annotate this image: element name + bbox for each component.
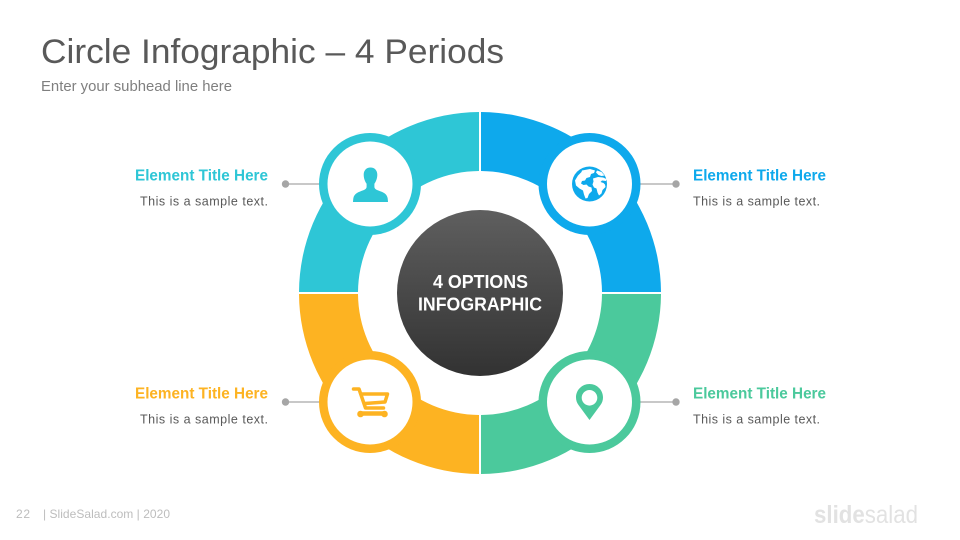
badge: globe: [538, 133, 640, 235]
text block: top-right: [693, 168, 826, 208]
text block: bottom-right: Element Title Here: [693, 386, 826, 402]
text block: top-left: Element Title Here: [135, 168, 268, 184]
icon: globe: [572, 166, 607, 202]
icon: person: [353, 168, 388, 202]
title: Circle Infographic – 4 Periods: [41, 33, 504, 71]
text block: top-right: Element Title Here: [693, 168, 826, 184]
center text: 4 OPTIONS: [433, 272, 528, 292]
segment: green bottom-right: [481, 294, 661, 474]
connector: top-right: [639, 180, 680, 188]
segment: amber bottom-left: [299, 294, 479, 474]
text block: top-left: This is a sample text.: [140, 194, 268, 208]
ring diagram: [299, 112, 661, 474]
text block: bottom-left: [135, 386, 268, 426]
center text: INFOGRAPHIC: [418, 294, 542, 314]
center circle: [397, 210, 563, 376]
text block: top-right: This is a sample text.: [693, 194, 820, 208]
logo: slidesalad: [814, 501, 918, 529]
center text: [418, 272, 542, 314]
connector: top-left: [282, 180, 321, 188]
subhead: Enter your subhead line here: [41, 79, 232, 95]
footer: | SlideSalad.com | 2020: [43, 507, 170, 521]
icon: shopping cart: [354, 389, 388, 417]
text block: bottom-left: Element Title Here: [135, 386, 268, 402]
text block: top-left: [135, 168, 268, 208]
connector: bottom-right: [639, 398, 680, 406]
segment: teal top-left: [299, 112, 479, 292]
segment: blue top-right: [481, 112, 661, 292]
text block: bottom-left: This is a sample text.: [140, 412, 268, 426]
badge: location pin: [538, 351, 640, 453]
badge: person: [319, 133, 421, 235]
icon: location pin: [576, 384, 603, 420]
text block: bottom-right: This is a sample text.: [693, 412, 820, 426]
badge: cart: [319, 351, 421, 453]
connector: bottom-left: [282, 398, 321, 406]
footer: 22: [16, 507, 30, 521]
text block: bottom-right: [693, 386, 826, 426]
